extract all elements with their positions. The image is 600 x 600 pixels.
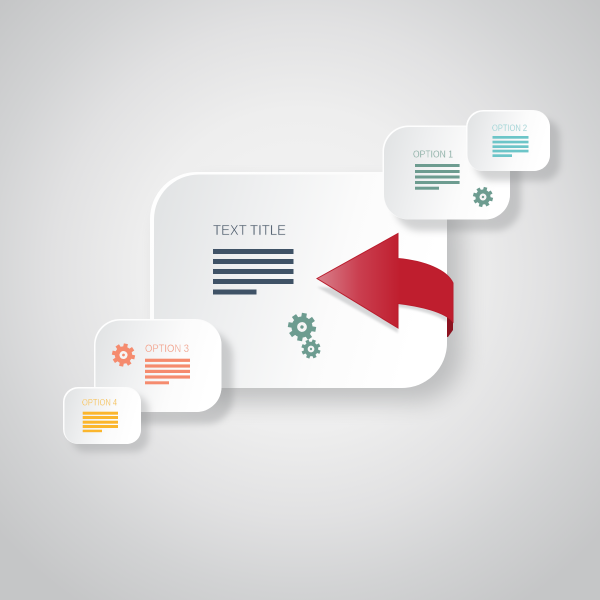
icon: gear option 3 bbox=[110, 341, 137, 369]
panel: option 2 bbox=[466, 110, 560, 181]
label: option 3: OPTION 3 bbox=[145, 343, 189, 355]
panel: option 3 bbox=[94, 319, 233, 424]
text lines: option 4 bbox=[83, 412, 118, 432]
label: option 1: OPTION 1 bbox=[413, 148, 453, 160]
icon: large gear bbox=[286, 311, 318, 343]
panel: main card bbox=[150, 172, 463, 402]
panel: option 4 bbox=[63, 387, 149, 452]
text lines: option 1 bbox=[415, 164, 460, 190]
panel: option 1 bbox=[382, 126, 521, 231]
icon: gear option 1 bbox=[471, 185, 495, 209]
text lines: main bbox=[213, 249, 294, 294]
heading: text title: TEXT TITLE bbox=[213, 222, 286, 239]
label: option 2: OPTION 2 bbox=[492, 123, 527, 133]
text lines: option 2 bbox=[492, 136, 528, 157]
arrow shadow bbox=[317, 287, 447, 333]
icon: small gear bbox=[299, 337, 323, 361]
label: option 4: OPTION 4 bbox=[82, 398, 117, 408]
arrow: red curved bbox=[317, 234, 453, 337]
text lines: option 3 bbox=[145, 359, 190, 384]
